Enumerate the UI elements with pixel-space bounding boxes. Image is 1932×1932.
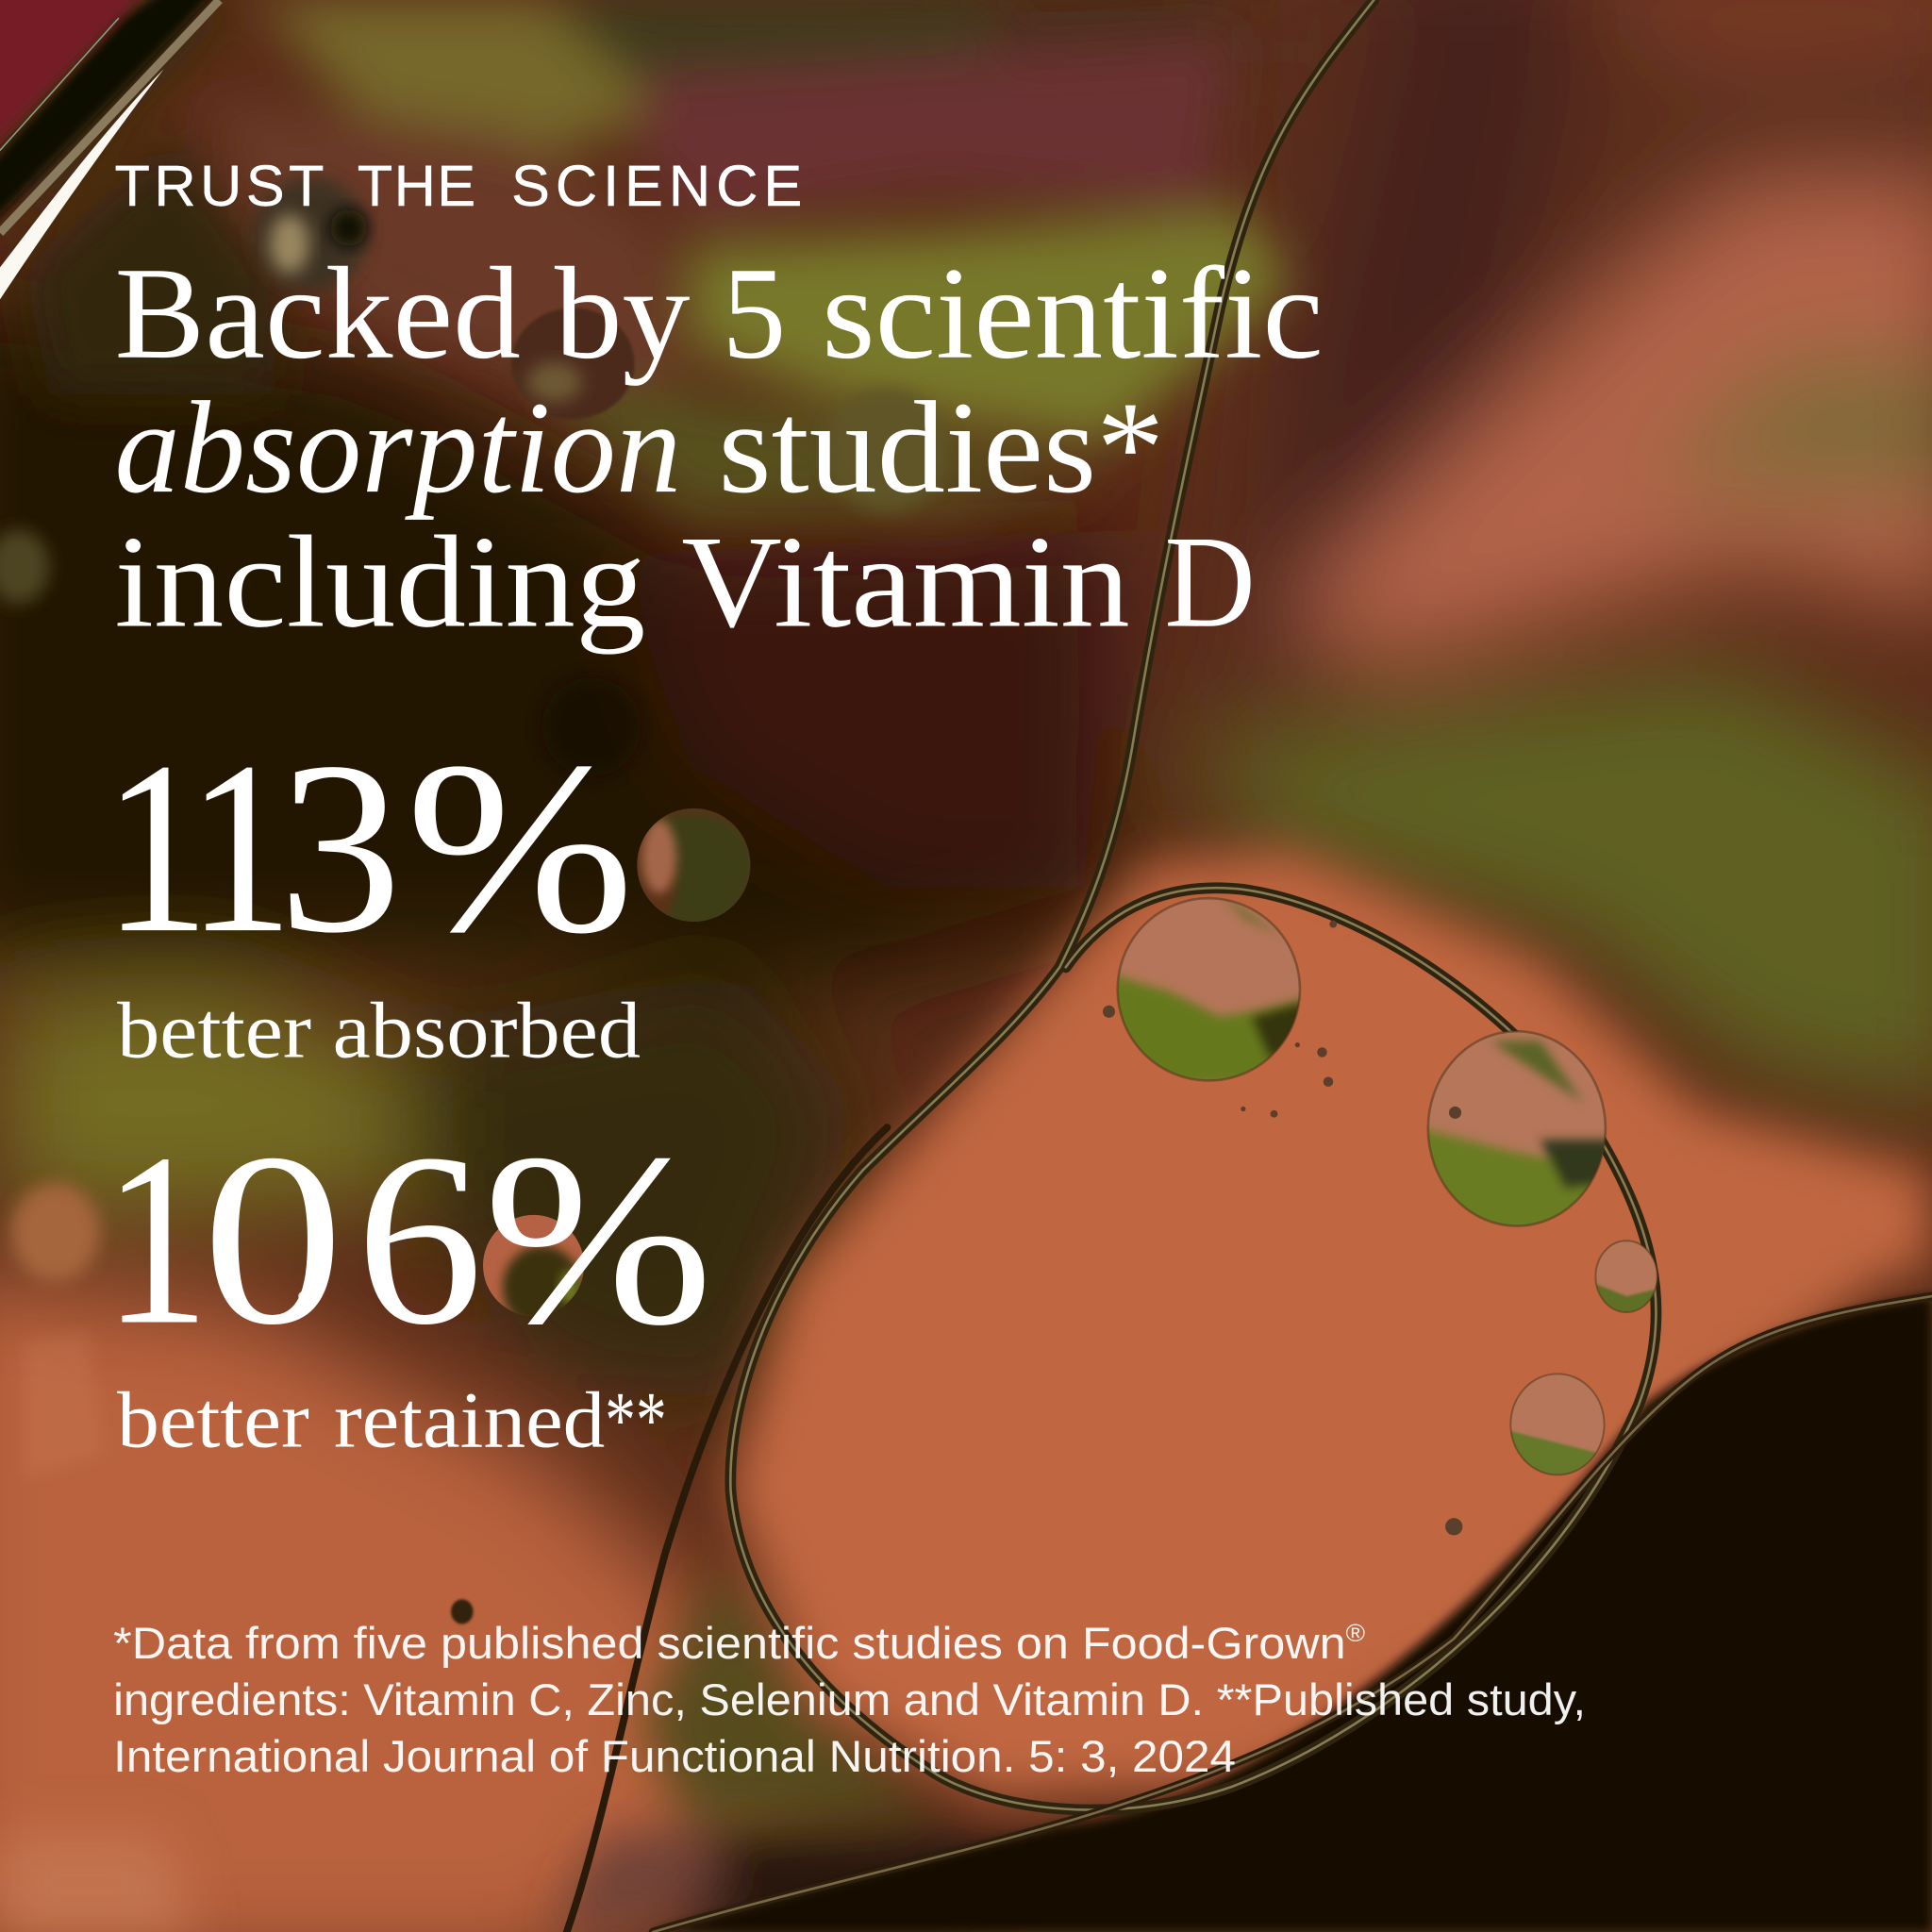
small background droplets (0, 177, 949, 1624)
heading: backed by 5 scientific absorption studies: Vitamin (681, 509, 1130, 656)
heading: backed by 5 scientific absorption studies: studies* (718, 375, 1164, 521)
statistic: 106% better retained: better (117, 1375, 309, 1464)
heading: backed by 5 scientific absorption studies: scientific (822, 241, 1324, 387)
footnote with study references: *Data from five published scientific studies on Food-Grown (113, 1618, 1265, 1668)
lighter salmon patches on the lower left (25, 1331, 105, 1478)
heading: backed by 5 scientific absorption studies: including (114, 509, 645, 656)
eyebrow: trust the science: TRUST (114, 154, 325, 219)
footnote with study references (113, 1618, 1586, 1781)
eyebrow: trust the science: THE (358, 154, 475, 219)
statistic: 106% better retained: % (483, 1102, 713, 1375)
eyebrow: trust the science (114, 154, 802, 219)
heading: backed by 5 scientific absorption studies (114, 241, 1324, 656)
statistic: 106% better retained: 6 (356, 1102, 483, 1375)
bubbles inside the oil drop (1103, 887, 1663, 1535)
heading: backed by 5 scientific absorption studies: absorption (114, 375, 681, 521)
statistic: 113% better absorbed (104, 710, 641, 1075)
heading: backed by 5 scientific absorption studies: 5 (722, 241, 786, 387)
footnote with study references: ® (1346, 1619, 1365, 1647)
statistic: 113% better absorbed: 1 (188, 710, 293, 984)
statistic: 113% better absorbed: better absorbed (117, 987, 641, 1075)
eyebrow: trust the science: SCIENCE (511, 154, 802, 219)
statistic: 113% better absorbed: % (406, 710, 635, 984)
dark area below the lower bubble edge (653, 1296, 1932, 1932)
top left corner shards (0, 0, 219, 228)
statistic: 106% better retained (104, 1102, 713, 1464)
heading: backed by 5 scientific absorption studies: Backed by (114, 241, 691, 387)
statistic: 106% better retained: ** (605, 1375, 667, 1464)
statistic: 113% better absorbed: 3 (278, 710, 402, 984)
footnote with study references: ingredients: Vitamin C, Zinc, Selenium and Vitamin D. **Published study, (113, 1674, 1586, 1724)
heading: backed by 5 scientific absorption studies: D (1164, 509, 1256, 656)
statistic: 106% better retained: 0 (202, 1102, 343, 1375)
footnote with study references: International Journal of Functional Nutrition. 5: 3, 2024 (113, 1731, 1236, 1781)
statistic: 106% better retained: 1 (104, 1102, 209, 1375)
white reflection shard (0, 69, 164, 299)
statistic: 113% better absorbed: 1 (104, 710, 209, 984)
statistic: 106% better retained: retained (334, 1375, 605, 1464)
